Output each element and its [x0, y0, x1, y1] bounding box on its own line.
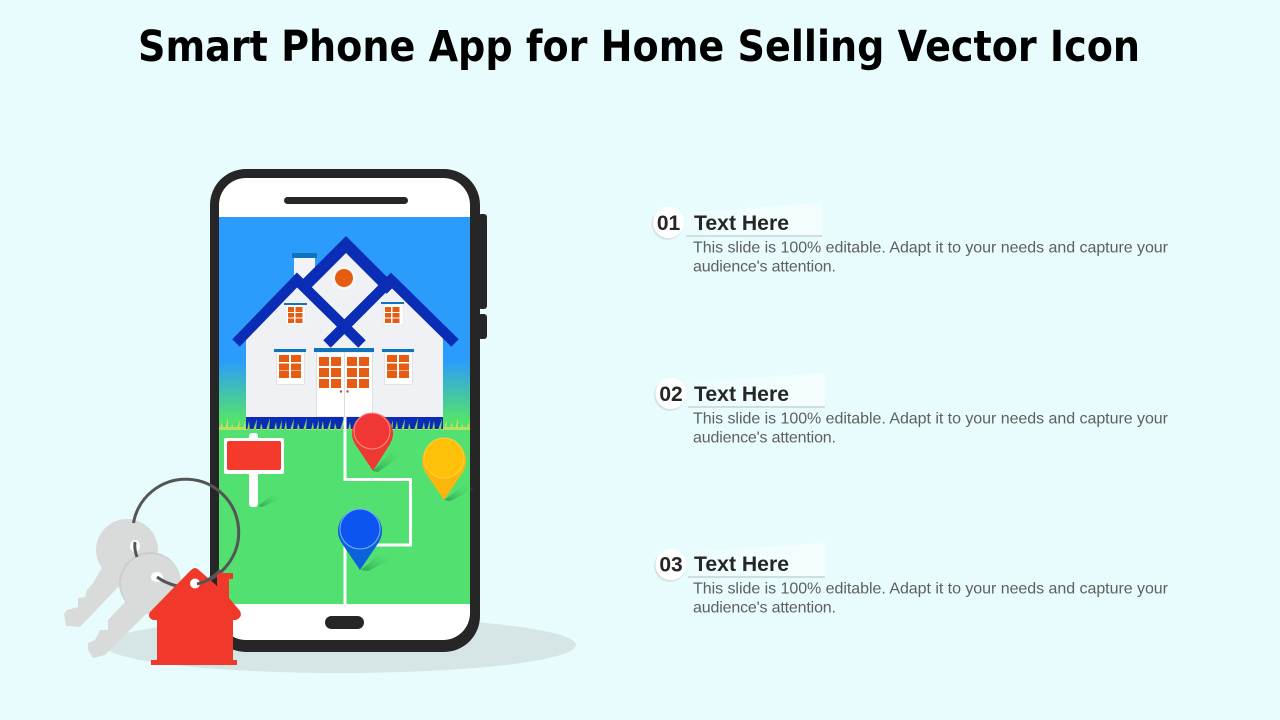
body text: audience's attention.	[693, 430, 836, 446]
route path	[345, 417, 410, 604]
heading: Text Here	[694, 383, 789, 406]
screen scene	[219, 217, 470, 604]
lower left window	[274, 349, 306, 384]
key ring with house tag	[64, 479, 241, 665]
body text: audience's attention.	[693, 258, 836, 276]
lower right window	[382, 349, 414, 384]
key 1	[64, 519, 158, 627]
ribbon	[686, 203, 822, 237]
chimney	[292, 253, 317, 288]
number badge	[654, 378, 686, 411]
pin: yellow	[422, 438, 474, 501]
phone body	[210, 169, 480, 652]
number badge: 02	[659, 383, 683, 406]
house walls	[246, 245, 443, 417]
foundation grass	[246, 417, 443, 430]
round attic window	[332, 266, 356, 290]
heading: Text Here	[694, 212, 789, 235]
phone screen frame	[219, 178, 470, 640]
item 02	[654, 373, 1169, 446]
item 03	[654, 543, 1169, 616]
grass strip	[219, 417, 470, 430]
heading: Text Here	[694, 553, 789, 576]
key 2	[88, 552, 181, 658]
number badge	[652, 207, 684, 240]
body text	[693, 580, 1169, 616]
roof	[236, 244, 455, 344]
number badge: 03	[659, 554, 683, 576]
sign shadow	[258, 494, 282, 507]
for sale sign	[224, 433, 284, 507]
ground shadow	[104, 617, 576, 673]
number badge	[654, 549, 686, 582]
pin: red	[352, 413, 404, 472]
body text: This slide is 100% editable. Adapt it to your needs and capture your	[693, 240, 1169, 256]
house tag	[149, 568, 241, 665]
body text	[693, 240, 1169, 276]
double door	[314, 348, 374, 417]
upper right window	[381, 302, 404, 325]
house	[236, 244, 455, 430]
pin: blue	[338, 509, 392, 571]
phone side buttons	[478, 214, 487, 339]
ribbon	[688, 543, 825, 578]
upper left window	[284, 303, 307, 325]
smartphone illustration	[210, 169, 487, 652]
home button	[325, 616, 364, 629]
key ring	[134, 479, 239, 584]
title: Smart Phone App for Home Selling Vector Icon	[138, 22, 1140, 72]
item 01	[652, 203, 1169, 276]
body text: This slide is 100% editable. Adapt it to your needs and capture your	[693, 580, 1169, 598]
body text: audience's attention.	[693, 600, 836, 616]
number badge: 01	[657, 212, 680, 235]
speaker	[284, 197, 408, 204]
ribbon	[688, 373, 825, 408]
body text: This slide is 100% editable. Adapt it to your needs and capture your	[693, 410, 1169, 428]
tag hole	[190, 578, 200, 588]
body text	[693, 410, 1169, 446]
